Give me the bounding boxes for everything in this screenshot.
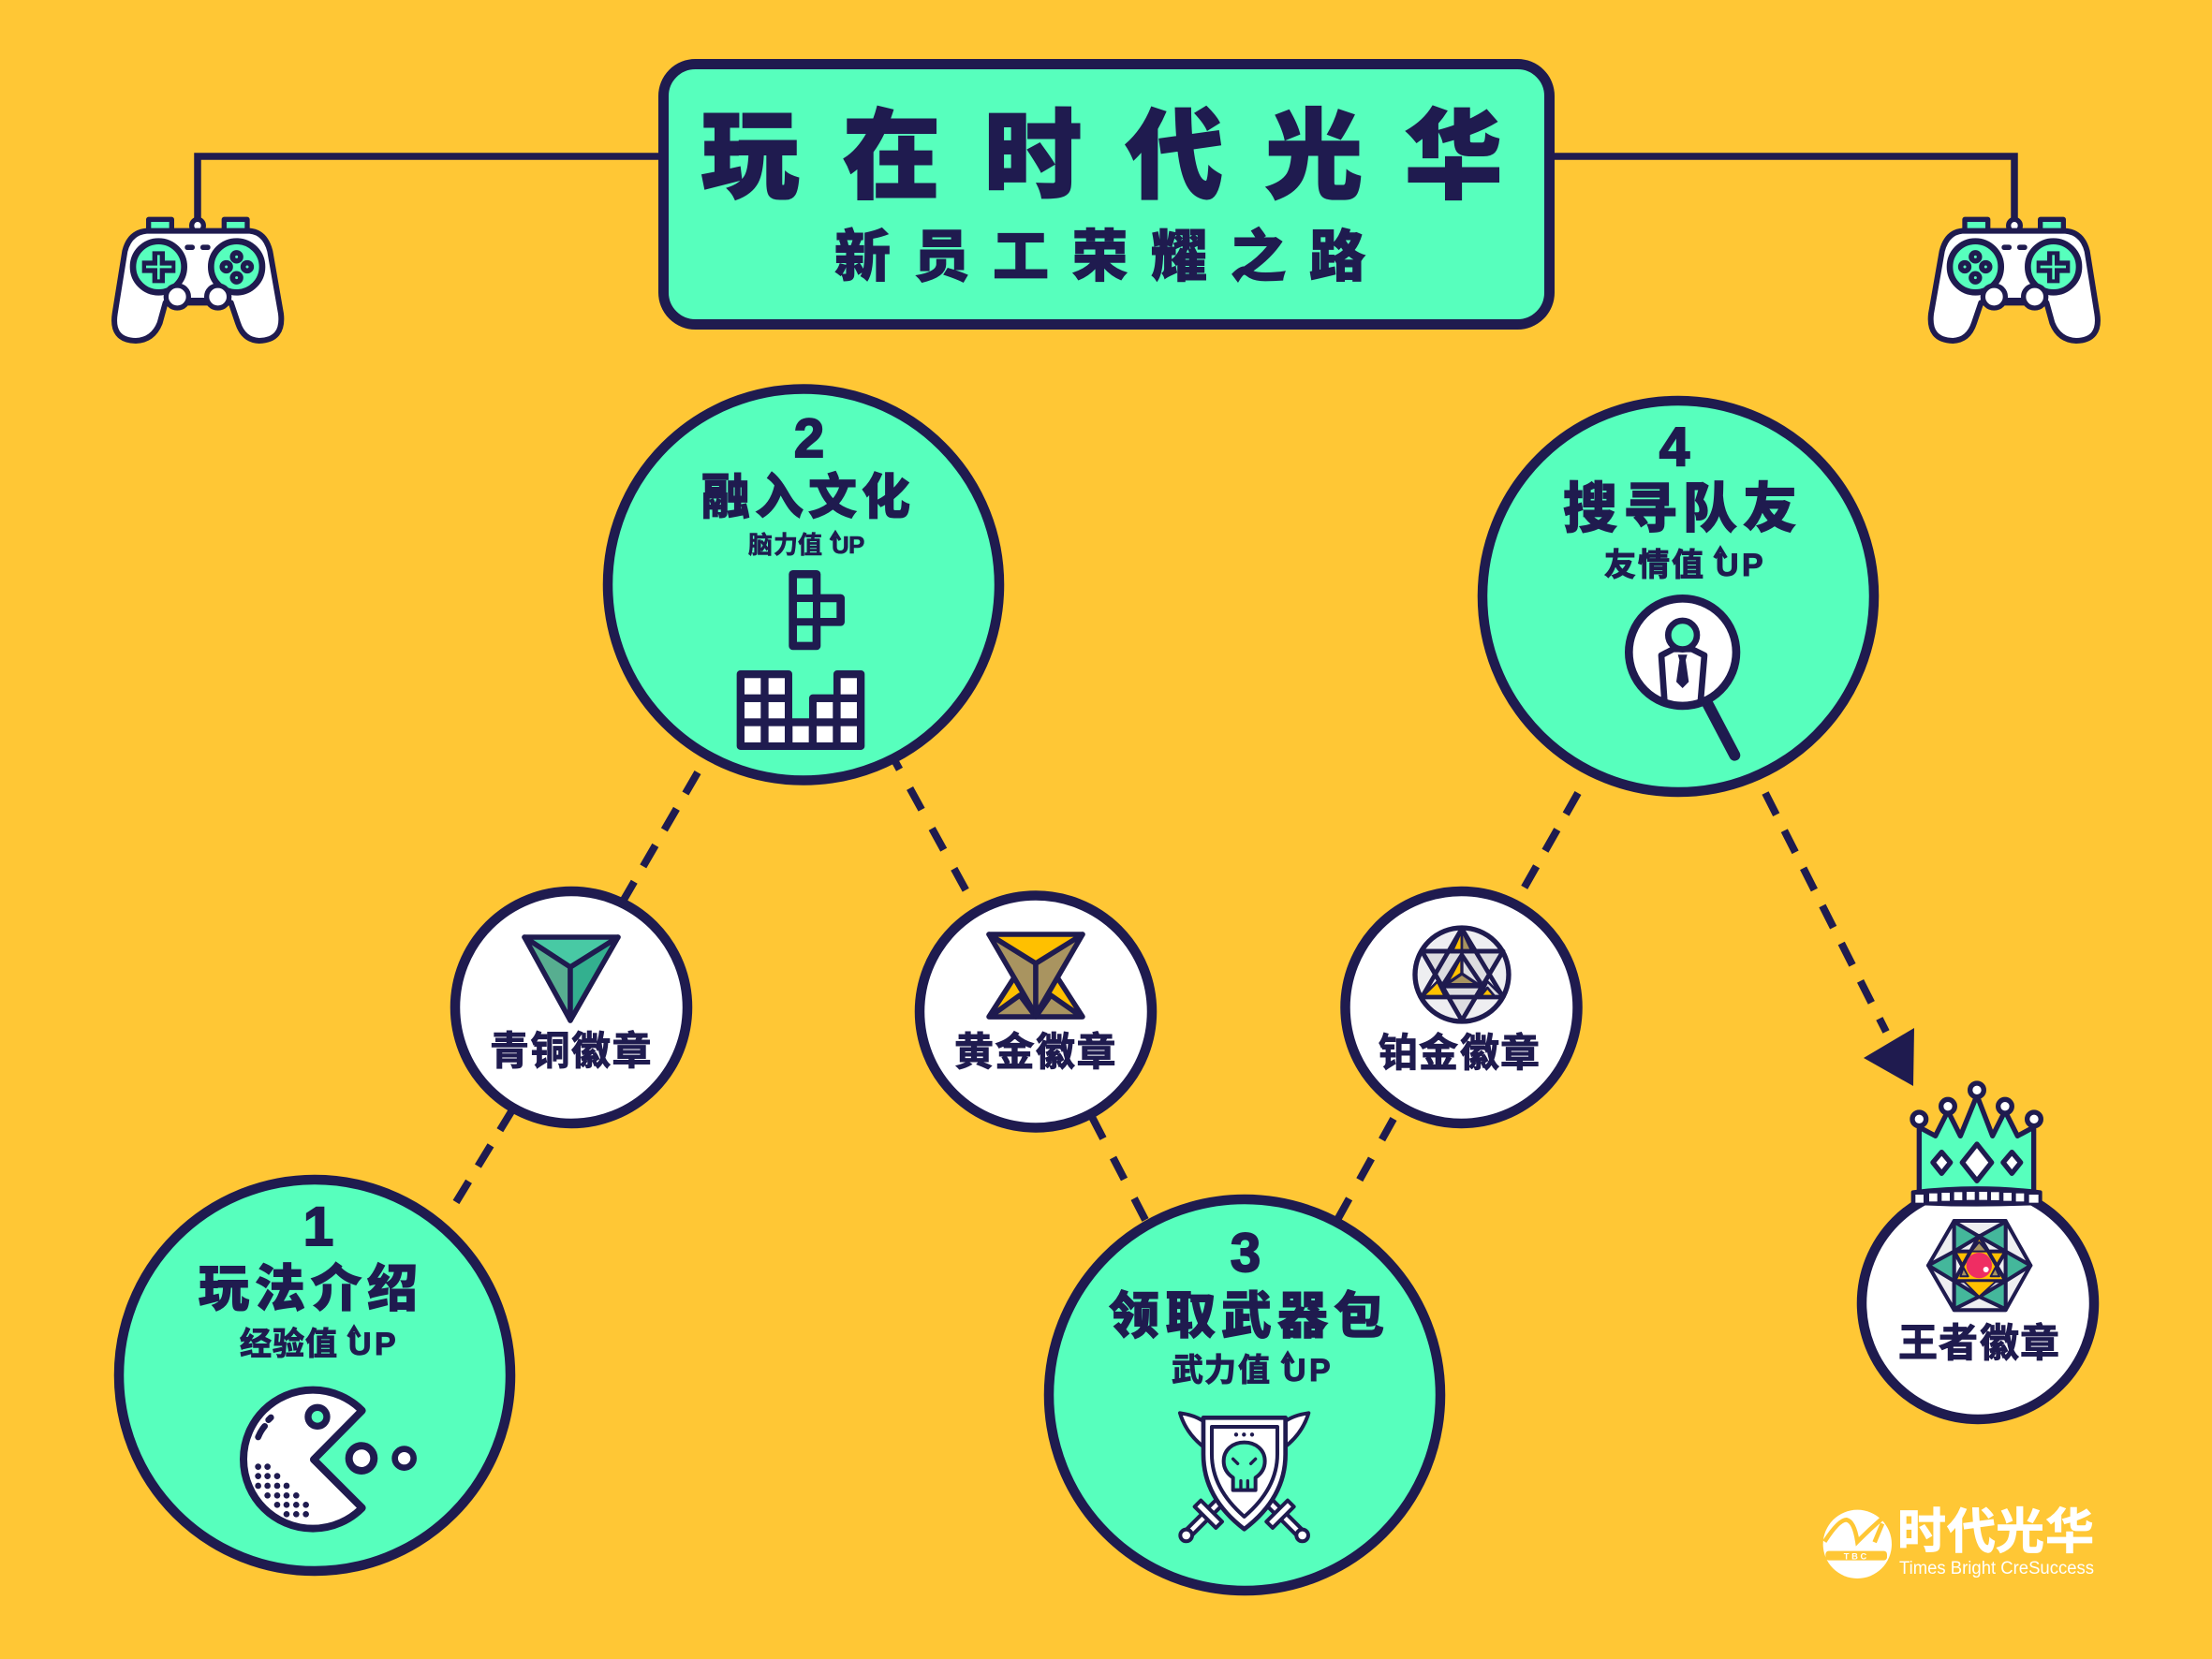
icon: left gamepad [114, 219, 281, 341]
panel: step 1 [119, 1180, 510, 1571]
connector: right wire from title to gamepad [1555, 156, 2014, 229]
badge: platinum [1345, 891, 1577, 1123]
logo tagline: Times Bright CreSuccess [1899, 1559, 2094, 1578]
platinum badge label: 铂金徽章 [1379, 1031, 1540, 1075]
connector: left wire from title to gamepad [198, 156, 658, 229]
badge: bronze [455, 891, 687, 1123]
title panel [663, 64, 1549, 324]
king badge label: 王者徽章 [1898, 1321, 2059, 1365]
gold badge label: 黄金徽章 [954, 1030, 1116, 1074]
icon: gold hourglass [989, 934, 1083, 1017]
logo wordmark: 时代光华 [1897, 1505, 2094, 1560]
step 2 stat: 脑力值UP [748, 531, 864, 559]
panel: step 3 [1049, 1199, 1440, 1591]
badge: gold [920, 895, 1152, 1127]
step 1 stat: 经验值UP [240, 1327, 396, 1362]
dashed path: gold badge to step 3 [1092, 1117, 1145, 1220]
dashed arrow line: step 4 to king badge [1765, 793, 1886, 1032]
icon: crown [1912, 1083, 2041, 1205]
step number 2: 2 [794, 408, 824, 469]
logo mark [1823, 1510, 1892, 1578]
step 3 heading: 领取武器包 [1109, 1288, 1384, 1344]
step number 1: 1 [303, 1197, 333, 1257]
step 1 heading: 玩法介绍 [199, 1261, 418, 1317]
arrowhead [1864, 1028, 1914, 1086]
step 3 stat: 武力值UP [1172, 1353, 1331, 1388]
main title: 玩在时代光华 [701, 103, 1502, 212]
logo [1823, 1505, 2094, 1578]
dashed path: step 3 to platinum badge [1337, 1119, 1394, 1220]
logo mark: TBC [1844, 1551, 1869, 1561]
subtitle: 新员工荣耀之路 [834, 226, 1365, 288]
icon: platinum star [1415, 928, 1509, 1021]
icon: magnifier with person [1629, 598, 1736, 756]
panel: step 2 [608, 389, 999, 781]
dashed path: step 2 to gold badge [888, 748, 966, 891]
icon: pacman [243, 1390, 414, 1529]
step 2 heading: 融入文化 [701, 471, 910, 525]
step number 4: 4 [1659, 417, 1689, 477]
step 4 stat: 友情值UP [1604, 548, 1763, 583]
step number 3: 3 [1231, 1223, 1261, 1284]
icon: right gamepad [1931, 219, 2098, 341]
bronze badge label: 青铜徽章 [490, 1029, 652, 1073]
step 4 heading: 搜寻队友 [1563, 478, 1797, 539]
icon: tetris blocks [741, 574, 861, 746]
badge: king [1862, 1083, 2094, 1419]
dashed path: step 1 to bronze badge [456, 1108, 513, 1202]
icon: shield and swords [1180, 1413, 1308, 1541]
dashed path: bronze badge to step 2 [620, 772, 698, 906]
panel: step 4 [1482, 401, 1874, 792]
icon: bronze triangle [524, 937, 618, 1020]
dashed path: platinum badge to step 4 [1519, 793, 1578, 897]
icon: king gem [1928, 1221, 2030, 1310]
